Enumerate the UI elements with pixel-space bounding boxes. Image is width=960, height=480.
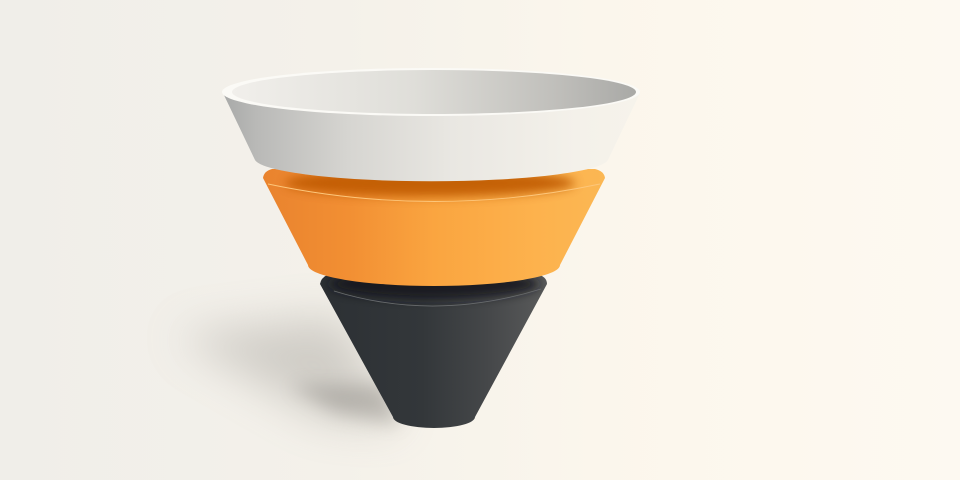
- funnel tier: orange middle: [263, 169, 605, 286]
- funnel tier: dark bottom cone: [320, 269, 547, 428]
- cast shadow: [175, 315, 400, 425]
- bowl inner surface: [232, 70, 636, 114]
- dark cone top shadow: [329, 269, 539, 299]
- bowl outer body: [223, 93, 640, 181]
- orange top shadow: [285, 169, 575, 197]
- bowl rim: [222, 68, 640, 116]
- orange highlight line: [268, 184, 600, 202]
- infographic: three-tier funnel: [167, 68, 640, 443]
- funnel tier: white top bowl: [222, 68, 640, 181]
- dark cone highlight line: [334, 289, 541, 306]
